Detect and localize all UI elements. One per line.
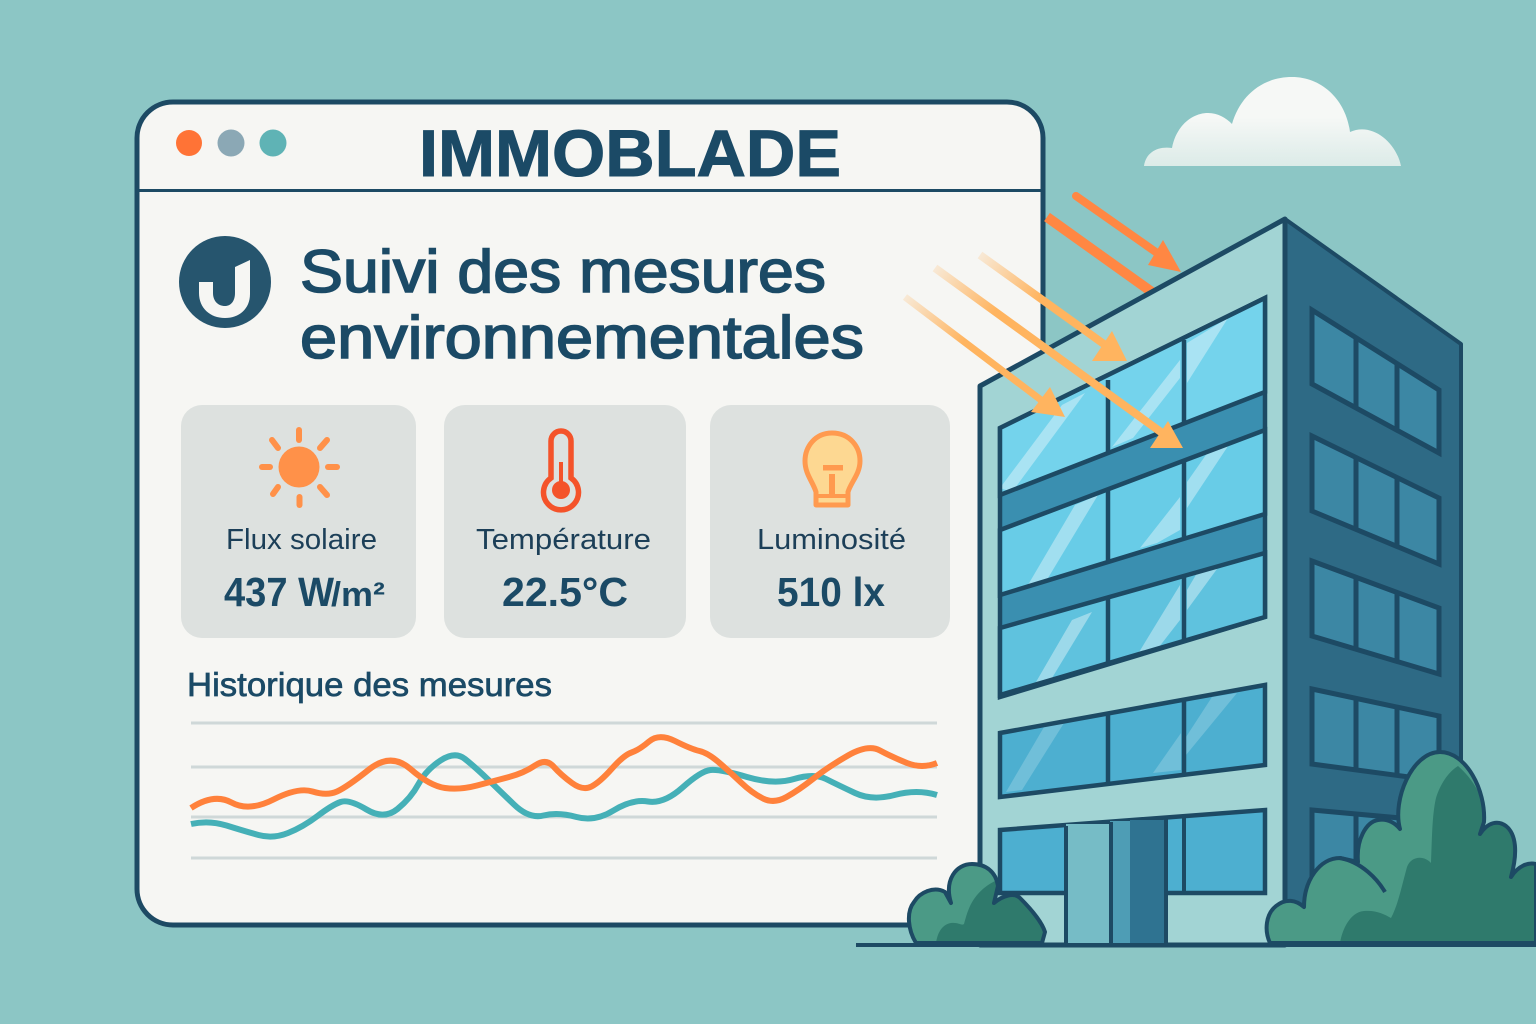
icon: logo	[179, 236, 271, 328]
side windows	[1312, 310, 1439, 900]
icon: sun	[262, 430, 337, 505]
card: température	[444, 405, 686, 638]
label: Température	[476, 524, 651, 556]
entrance door	[1066, 816, 1184, 944]
heading: page title: environnementales	[300, 304, 864, 371]
window dots	[176, 130, 286, 156]
bush: right	[1267, 752, 1536, 943]
icon: thermometer	[544, 431, 579, 510]
right face	[1285, 219, 1461, 945]
value: 437 W	[224, 569, 334, 615]
heading: brand name: IMMOBLADE	[419, 116, 841, 190]
heading: history: Historique des mesures	[187, 666, 552, 703]
value: 22.5°C	[502, 569, 628, 615]
window frames	[1000, 298, 1265, 695]
header divider	[138, 189, 1043, 192]
arrow: solar ray 4	[935, 268, 1183, 448]
panel: browser window	[137, 102, 1043, 925]
arrow: solar ray 3	[980, 255, 1127, 361]
arrow: solar ray 1	[1076, 196, 1181, 272]
ground floor windows	[1000, 810, 1265, 893]
icon: light bulb	[805, 433, 860, 505]
panel frame	[137, 102, 1043, 925]
icon: cloud	[1144, 77, 1401, 166]
card: flux solaire	[181, 405, 416, 638]
front face	[980, 219, 1285, 945]
glass highlights	[1000, 318, 1232, 682]
label: Luminosité	[757, 524, 906, 556]
heading: page title: Suivi des mesures	[300, 238, 826, 305]
label: Flux solaire	[226, 524, 377, 556]
building	[980, 219, 1461, 945]
value: 510 lx	[777, 569, 885, 615]
infographic canvas	[134, 77, 1536, 948]
bush: left	[909, 864, 1045, 943]
value: /m²	[331, 576, 385, 614]
arrow: solar ray 5	[905, 297, 1065, 417]
heading: page title	[300, 238, 864, 371]
series: orange	[191, 737, 937, 808]
arrow: solar ray 2	[1047, 217, 1156, 295]
ground line	[856, 943, 1536, 947]
card: luminosité	[710, 405, 950, 638]
series: teal	[191, 755, 937, 837]
line chart	[191, 723, 937, 858]
second window band	[1000, 685, 1265, 797]
upper window block	[1000, 298, 1265, 697]
